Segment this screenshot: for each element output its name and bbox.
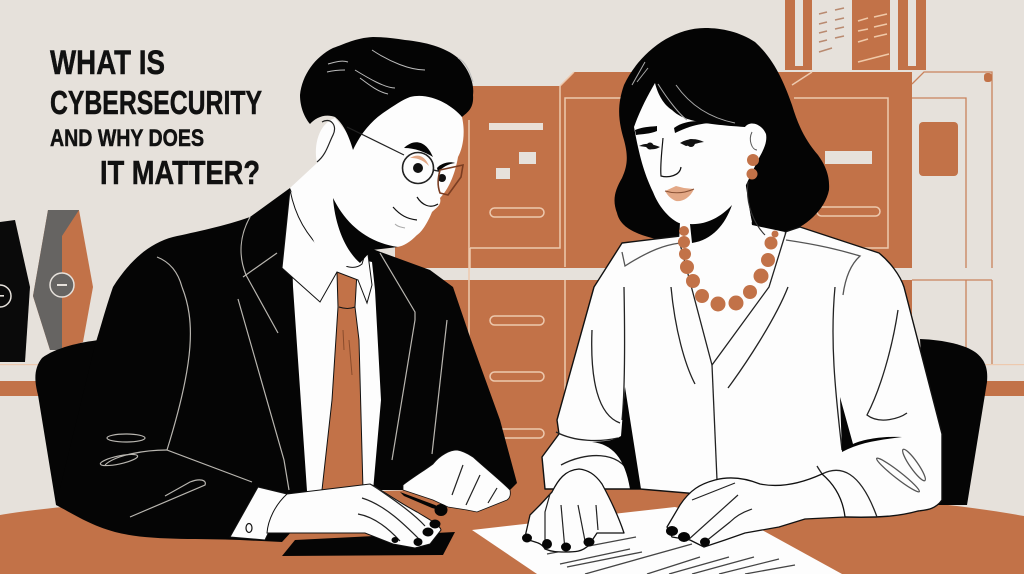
table bbox=[0, 489, 1024, 574]
sheet of paper bbox=[472, 507, 842, 574]
man: right hand pointing bbox=[400, 450, 510, 516]
right chair bbox=[920, 339, 987, 505]
left shelf and right shelf bbox=[0, 364, 1024, 396]
black tablet bbox=[282, 532, 455, 556]
hair strands bbox=[632, 62, 735, 123]
panel: top shelf binders bbox=[785, 0, 926, 70]
cabinet labels bbox=[489, 123, 543, 130]
cream cabinet details bbox=[912, 72, 992, 364]
eyebrows bbox=[404, 142, 433, 157]
woman: face bbox=[632, 62, 766, 243]
lips bbox=[665, 186, 694, 201]
woman's right hand on paper bbox=[666, 474, 845, 547]
man: tie bbox=[322, 272, 363, 490]
title: WHAT IS bbox=[50, 44, 165, 82]
eyes bbox=[639, 144, 660, 149]
title: AND WHY DOES bbox=[50, 125, 204, 152]
woman: earring bbox=[746, 154, 759, 180]
icon: shelf lock ornaments bbox=[0, 210, 93, 362]
man: collar bbox=[282, 190, 372, 303]
woman's hair bbox=[615, 28, 829, 243]
neck shadow bbox=[333, 198, 398, 263]
ear bbox=[317, 120, 335, 162]
neck bbox=[679, 180, 785, 365]
woman: necklace bbox=[678, 226, 778, 312]
panel: filing cabinets bbox=[395, 72, 992, 500]
underarm shadows bbox=[592, 387, 641, 489]
man: neck and face bbox=[290, 85, 464, 272]
left chair bbox=[35, 340, 130, 510]
man: shirt bbox=[290, 190, 381, 491]
neck shadow bbox=[690, 190, 752, 242]
title bbox=[50, 44, 262, 191]
man: glasses bbox=[347, 127, 463, 195]
eyebrows bbox=[635, 126, 657, 135]
woman's left hand bbox=[522, 469, 624, 552]
ear bbox=[750, 132, 757, 150]
blouse folds bbox=[556, 232, 928, 517]
suit seams bbox=[100, 217, 447, 517]
nose bbox=[417, 197, 438, 206]
woman: blouse bbox=[542, 180, 942, 517]
title: IT MATTER? bbox=[100, 154, 260, 191]
title: CYBERSECURITY bbox=[50, 84, 262, 121]
man: left hand and cuff bbox=[230, 484, 441, 548]
eyes bbox=[410, 156, 429, 166]
mouth bbox=[393, 207, 417, 220]
man: hair bbox=[300, 37, 473, 150]
man: suit bbox=[56, 188, 517, 542]
nose bbox=[661, 138, 681, 177]
right cream cabinet bbox=[912, 72, 992, 268]
